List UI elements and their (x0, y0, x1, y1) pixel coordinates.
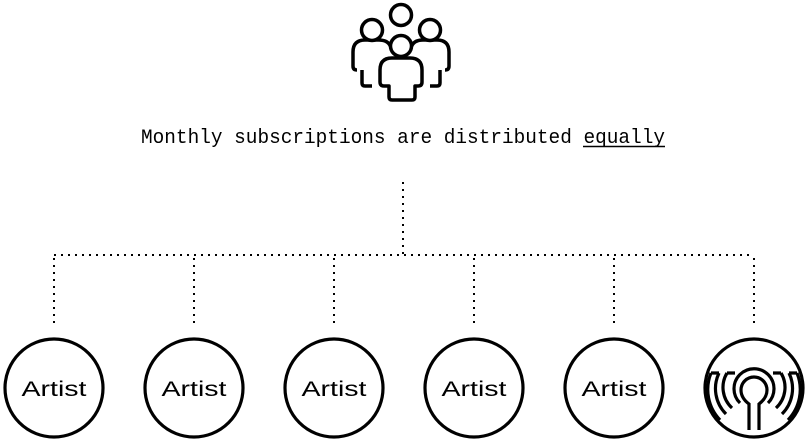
heading text: Monthly subscriptions are distributed equally (141, 127, 665, 150)
diagram: Artist (582, 378, 647, 401)
dotted connectors (54, 182, 754, 326)
icon: platform logo (708, 369, 800, 430)
diagram: Artist (442, 378, 507, 401)
diagram: Artist (302, 378, 367, 401)
diagram: Artist (22, 378, 87, 401)
icon: people group (353, 4, 449, 100)
artist circles (5, 339, 803, 437)
diagram: Artist (162, 378, 227, 401)
